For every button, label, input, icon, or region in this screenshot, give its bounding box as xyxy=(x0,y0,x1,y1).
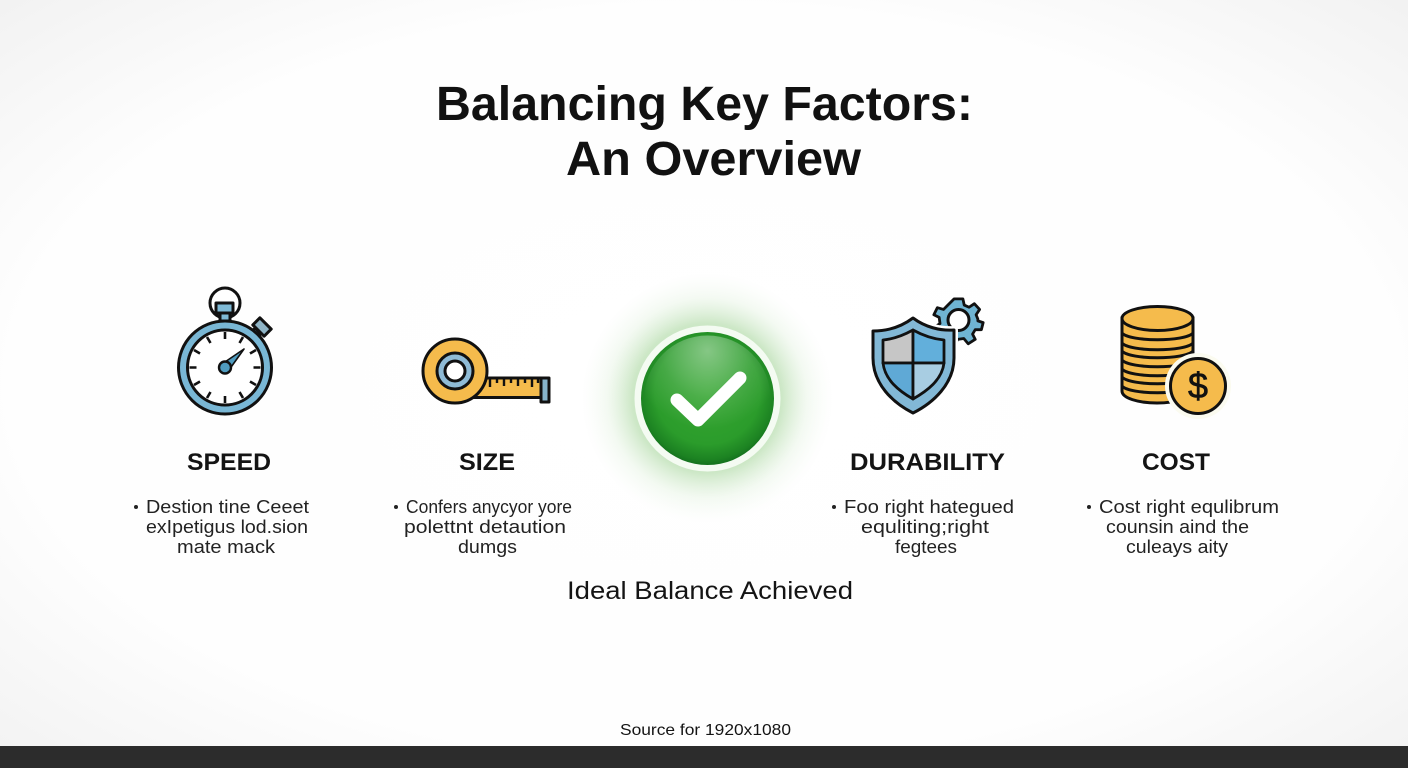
text block: durability xyxy=(832,497,1014,557)
heading: cost: COST xyxy=(1142,449,1210,476)
icon: measuring tape xyxy=(423,339,549,403)
text block: size: polettnt detaution xyxy=(404,517,566,537)
heading: size: SIZE xyxy=(459,449,515,476)
text block: speed: mate mack xyxy=(177,537,276,557)
panel: durability xyxy=(832,299,1014,557)
text block: durability: fegtees xyxy=(895,537,957,557)
text block: size: dumgs xyxy=(458,537,517,557)
panel: ideal balance xyxy=(567,273,853,605)
text block: cost: culeays aity xyxy=(1126,537,1228,557)
text block: cost xyxy=(1087,497,1279,557)
text block: size: Confers anycyor yore xyxy=(406,497,572,517)
text block: speed xyxy=(134,497,309,557)
heading: durability: DURABILITY xyxy=(850,449,1005,476)
caption: Ideal Balance Achieved xyxy=(567,577,853,605)
heading: speed: SPEED xyxy=(187,449,271,476)
text block: speed: exIpetigus lod.sion xyxy=(146,517,308,537)
icon: shield with gear xyxy=(873,299,983,413)
text block: size xyxy=(394,497,572,557)
source note: Source for 1920x1080 xyxy=(620,722,791,739)
panel: cost xyxy=(1087,306,1279,557)
title xyxy=(436,78,973,186)
panel: speed xyxy=(134,288,309,557)
footer bar xyxy=(0,746,1408,768)
glow xyxy=(582,273,832,523)
title: Balancing Key Factors: xyxy=(436,78,973,131)
icon: coin stack with dollar xyxy=(1122,306,1231,419)
text block: cost: Cost right equlibrum xyxy=(1099,497,1279,517)
icon: stopwatch xyxy=(178,288,272,414)
text block: cost: counsin aind the xyxy=(1106,517,1249,537)
text block: durability: Foo right hategued xyxy=(844,497,1014,517)
panel: size xyxy=(394,339,572,557)
text block: speed: Destion tine Ceeet xyxy=(146,497,309,517)
title: An Overview xyxy=(566,133,862,186)
icon: coin stack with dollar: $ xyxy=(1188,365,1208,406)
text block: durability: equliting;right xyxy=(861,517,989,537)
icon: green check badge xyxy=(634,326,780,472)
